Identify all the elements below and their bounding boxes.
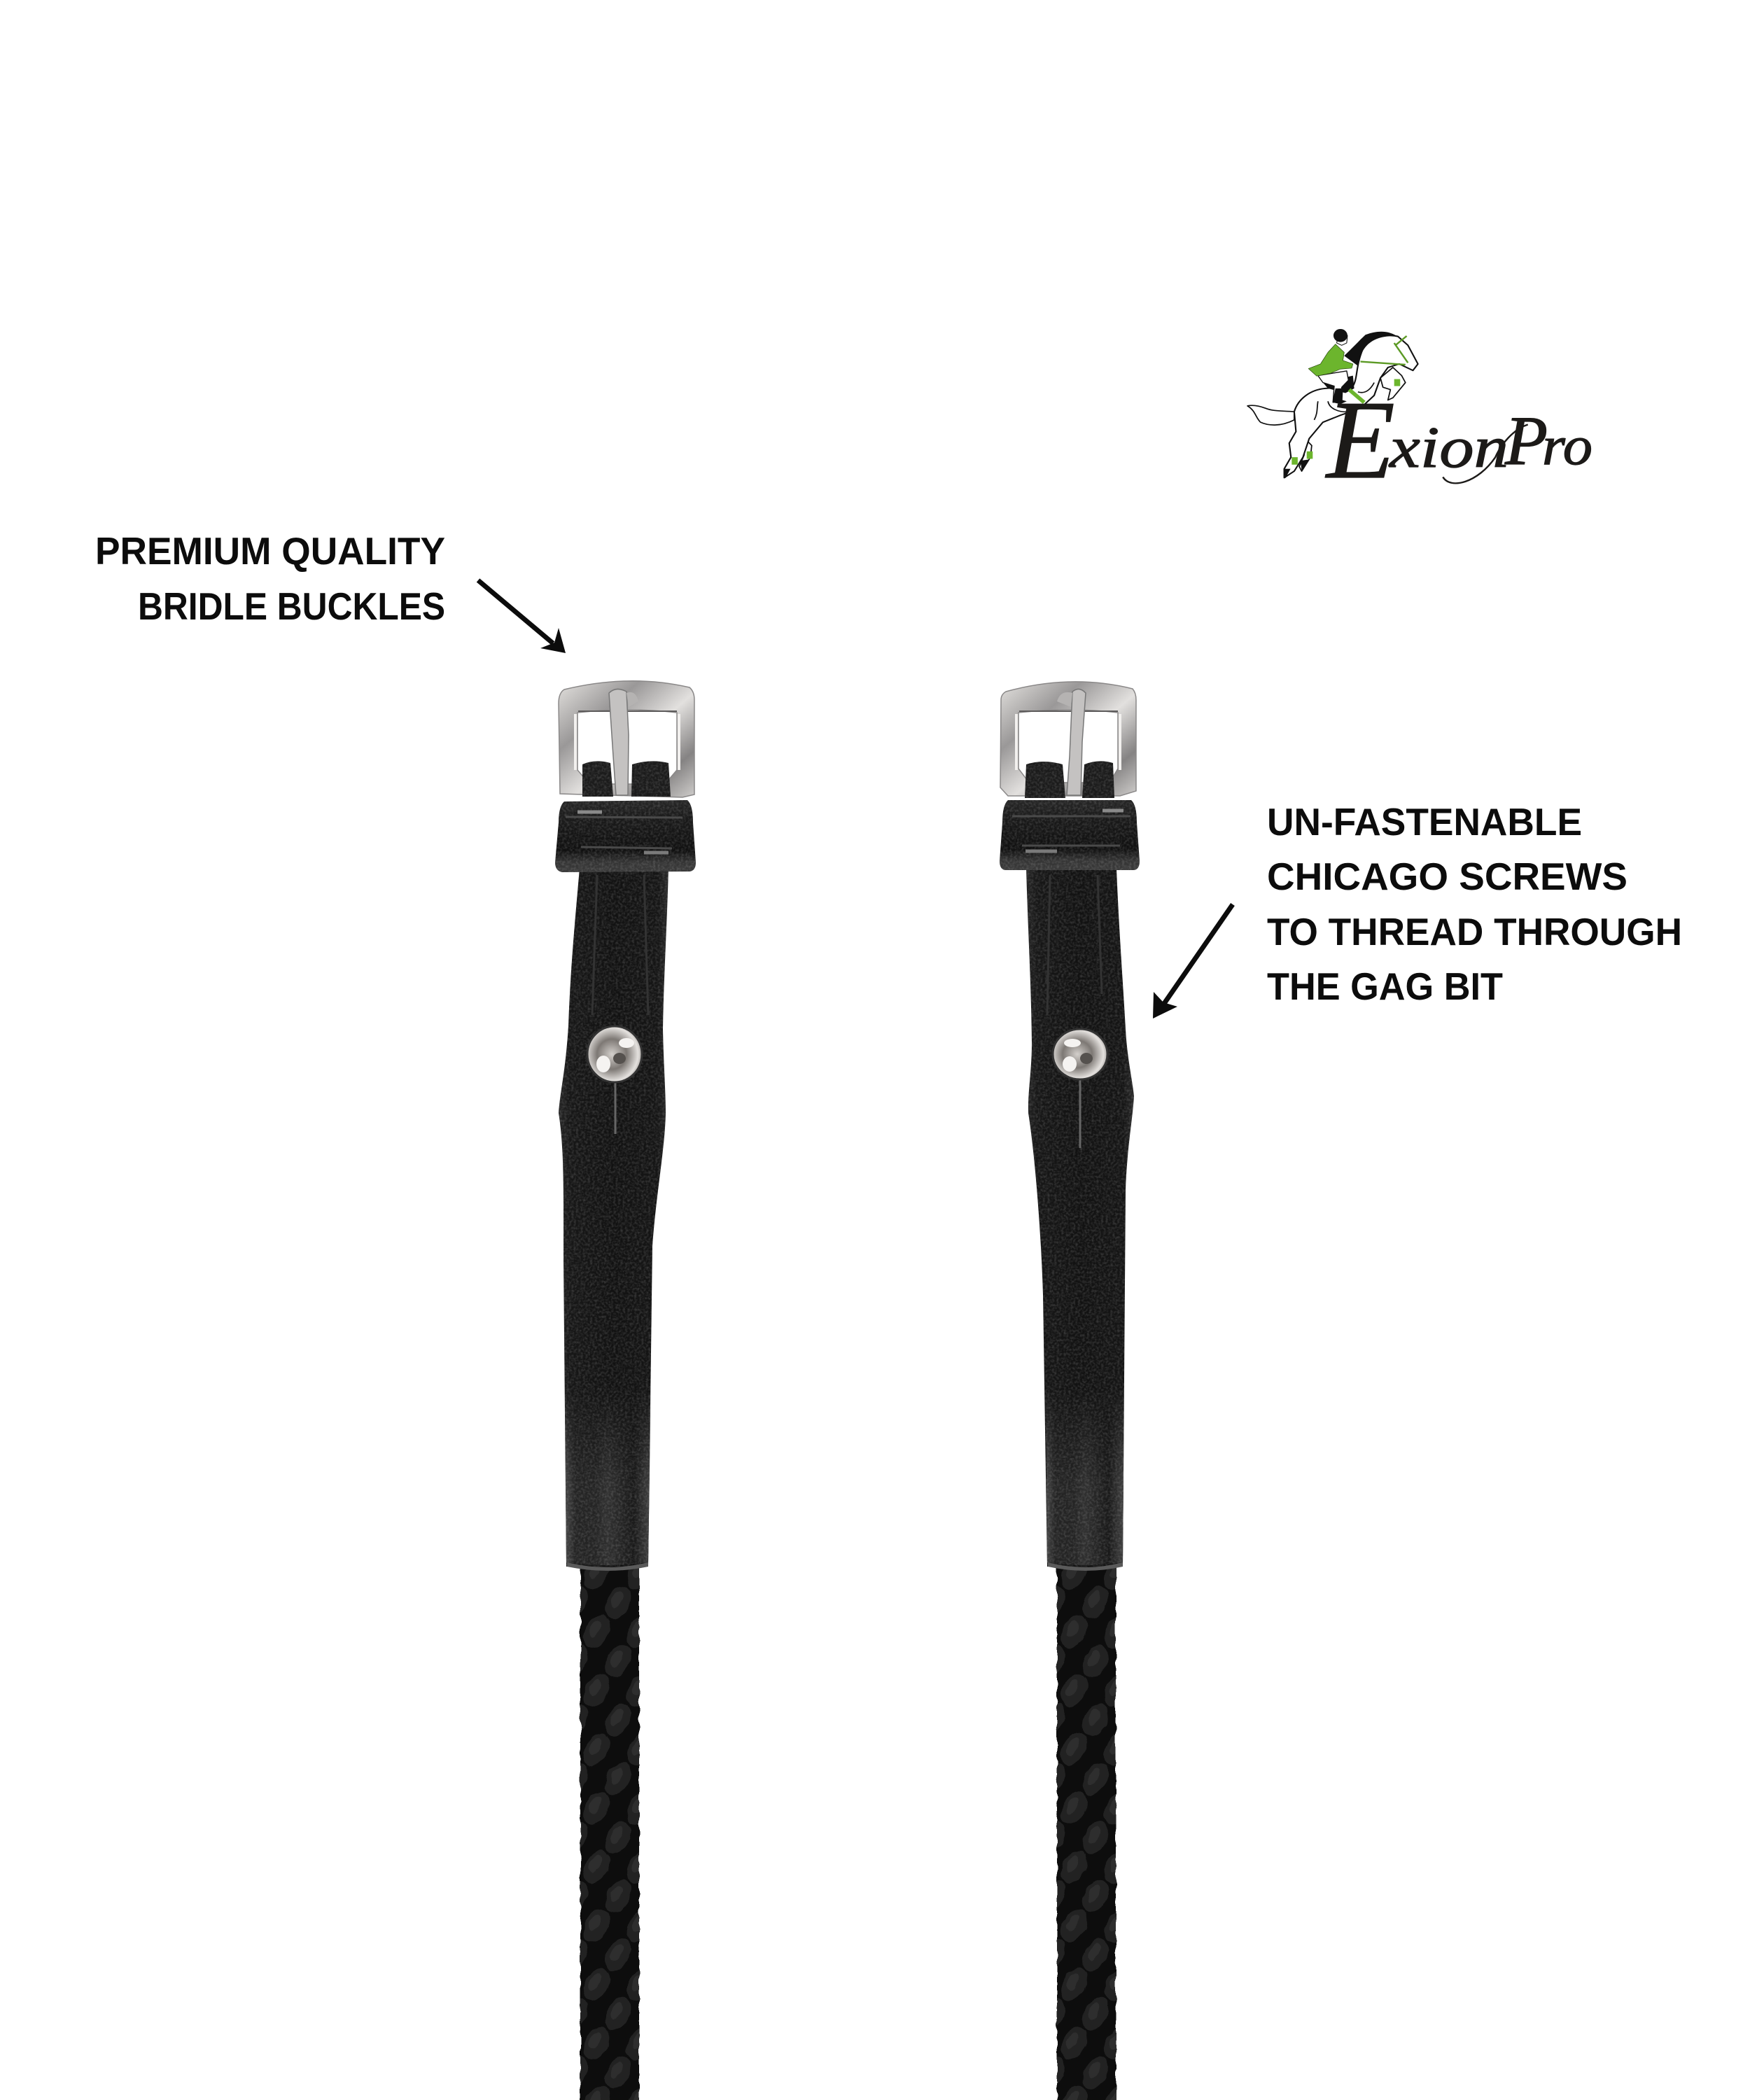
- logo: ExionPro: [1247, 329, 1592, 502]
- horse mane: [1344, 332, 1396, 366]
- logo wordmark: ro: [1542, 415, 1592, 476]
- left rope rein: [580, 1561, 639, 2100]
- callout: premium quality bridle buckles: [95, 529, 445, 628]
- left buckle tongue: [609, 689, 629, 795]
- right buckle loops: [1025, 761, 1114, 798]
- right sleeve lip: [1048, 1562, 1123, 1571]
- left strap stitching lines: [592, 875, 648, 1134]
- right rivet: [1053, 1029, 1107, 1079]
- right leather strap: [1026, 868, 1134, 1567]
- left sleeve end: [565, 1386, 651, 1565]
- right buckle: [1000, 682, 1136, 798]
- left sleeve lip: [567, 1562, 648, 1571]
- right buckle tongue: [1067, 689, 1086, 795]
- callout: premium quality bridle buckles: PREMIUM QUALITY: [95, 529, 445, 573]
- horse body: [1284, 335, 1418, 477]
- infographic canvas: [98, 329, 1680, 2100]
- hoof boots: [1292, 457, 1298, 465]
- horse body shading: [1314, 383, 1374, 420]
- wordmark swash: [1443, 424, 1528, 483]
- right strap stitching lines: [1047, 875, 1102, 1148]
- horse tail: [1247, 405, 1294, 425]
- reins and bridle: [1360, 336, 1408, 365]
- callout: chicago screws: UN-FASTENABLE: [1267, 800, 1582, 844]
- callout: chicago screws: CHICAGO SCREWS: [1267, 855, 1628, 898]
- left buckle: [559, 681, 694, 797]
- arrow: to buckle: [478, 580, 566, 653]
- horse front legs: [1380, 368, 1406, 400]
- girth: [1349, 390, 1364, 402]
- left keeper highlights: [566, 812, 682, 853]
- left keeper: [555, 800, 696, 872]
- rider head and helmet: [1337, 335, 1348, 345]
- rider jacket: [1308, 344, 1353, 376]
- right rope rein: [1057, 1561, 1116, 2100]
- right keeper: [1000, 800, 1140, 870]
- logo wordmark: P: [1504, 402, 1548, 479]
- logo wordmark: E: [1325, 377, 1395, 502]
- callout: chicago screws: TO THREAD THROUGH: [1267, 910, 1682, 953]
- hooves: [1284, 469, 1291, 478]
- callout: chicago screws: [1267, 800, 1682, 1008]
- arrow: to chicago screw: [1153, 904, 1233, 1018]
- right strap assembly: [1000, 682, 1140, 2100]
- logo icon: jumping horse and rider: [1247, 329, 1528, 483]
- rider breeches and boot: [1318, 371, 1348, 402]
- left leather strap: [559, 868, 668, 1567]
- callout: chicago screws: THE GAG BIT: [1267, 965, 1503, 1008]
- logo wordmark: [1325, 377, 1592, 502]
- left rivet: [587, 1026, 642, 1082]
- right sleeve end: [1046, 1386, 1124, 1565]
- callout: premium quality bridle buckles: BRIDLE BUCKLES: [138, 584, 445, 628]
- saddle: [1323, 376, 1354, 393]
- left buckle loops: [582, 761, 671, 797]
- left strap assembly: [555, 681, 696, 2100]
- right keeper highlights: [1012, 811, 1130, 851]
- logo wordmark: xion: [1388, 415, 1508, 480]
- horse far hind leg: [1299, 434, 1312, 471]
